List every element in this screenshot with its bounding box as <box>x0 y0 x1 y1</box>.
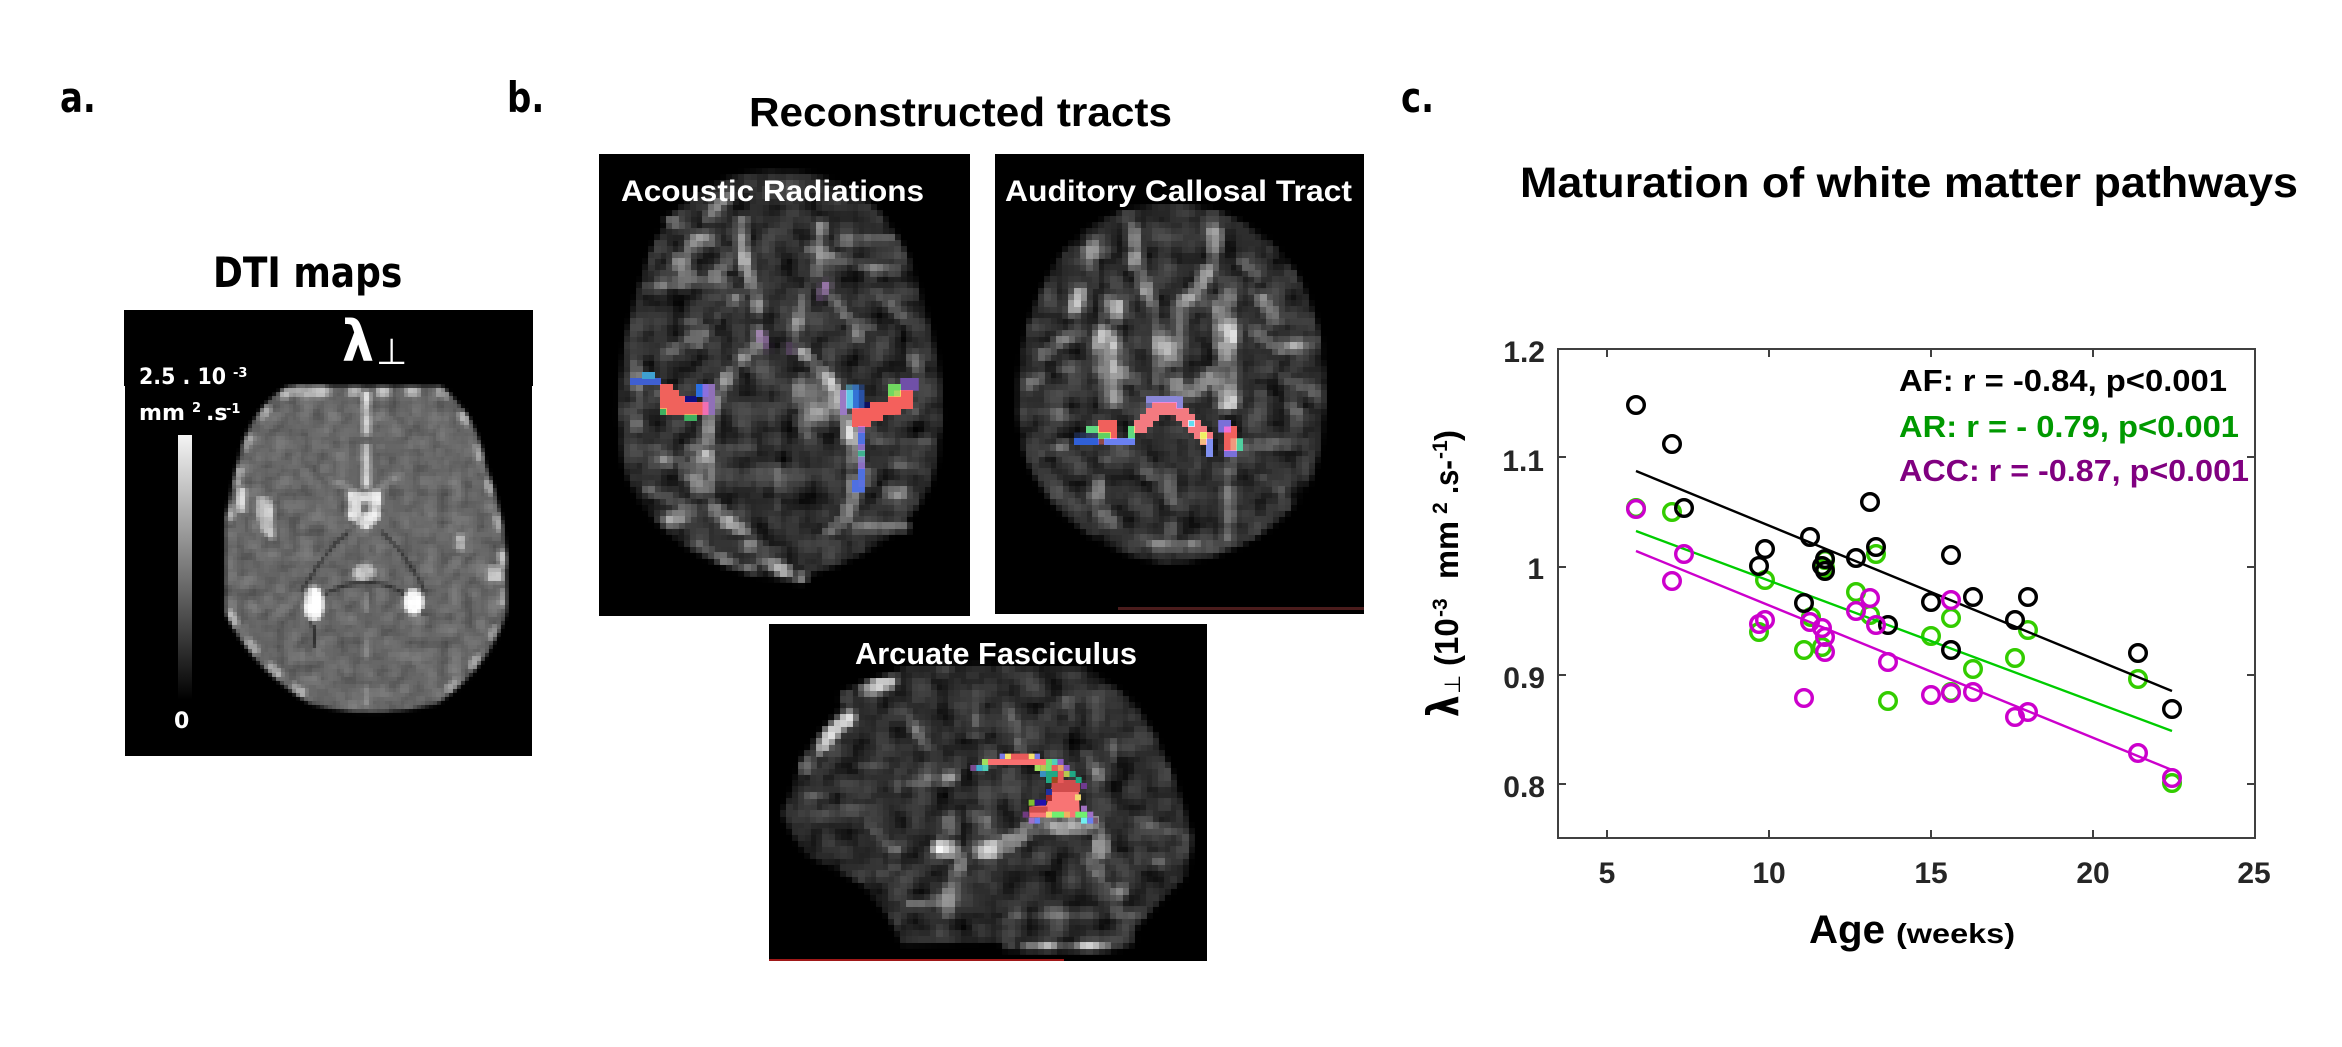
x axis title: (weeks) <box>1896 918 2015 949</box>
symbol: lambda perpendicular: λ <box>342 308 374 375</box>
colour scale maximum label: -3 <box>233 366 247 381</box>
y axis tick labels <box>1502 336 1545 804</box>
panel label: c: c. <box>1401 74 1434 122</box>
panel: Auditory Callosal Tract <box>995 154 1364 614</box>
x axis tick labels: 10 <box>1752 857 1786 890</box>
y axis title: ⊥ <box>1441 675 1466 694</box>
colour scale maximum label: mm <box>139 401 185 426</box>
y axis title: mm <box>1428 521 1465 579</box>
y axis title: 2 <box>1429 502 1452 514</box>
y axis tick labels: 0.9 <box>1503 662 1545 695</box>
label: Auditory Callosal Tract: Auditory Callosal Tract <box>1005 175 1352 208</box>
colour scale maximum label <box>139 365 247 426</box>
panel background <box>599 154 970 616</box>
panel label: b: b. <box>507 74 544 122</box>
tract overlay: left and right acoustic radiations <box>632 373 916 489</box>
panel background <box>995 154 1364 614</box>
label: Acoustic Radiations: Acoustic Radiations <box>621 175 924 208</box>
series: AR regression line <box>1636 531 2172 731</box>
scatter chart <box>1419 336 2271 952</box>
y axis title: ) <box>1428 430 1465 441</box>
y axis title <box>1419 430 1469 717</box>
y axis tick labels: 1 <box>1527 553 1544 586</box>
heading: Maturation of white matter pathways: Maturation of white matter pathways <box>1520 159 2298 207</box>
series: AR data points <box>1628 500 2180 791</box>
colour scale maximum label: 2.5 . 10 <box>139 365 226 390</box>
brain axial image <box>1018 206 1325 563</box>
tract overlay: callosal arch <box>1074 400 1241 457</box>
x axis title: Age <box>1809 908 1885 952</box>
series: AF data points <box>1628 397 2180 717</box>
legend: correlation statistics: AR: r = - 0.79, p<0.001 <box>1899 409 2239 444</box>
symbol: lambda perpendicular: ⊥ <box>376 332 407 373</box>
heading: Reconstructed tracts: Reconstructed tracts <box>749 89 1172 135</box>
x axis tick labels: 25 <box>2237 857 2271 890</box>
colour bar <box>178 435 192 700</box>
x axis tick labels: 5 <box>1599 857 1615 890</box>
series: ACC data points <box>1628 501 2180 786</box>
legend: correlation statistics: AF: r = -0.84, p<0.001 <box>1899 363 2227 398</box>
colour scale maximum label: .s <box>206 401 227 426</box>
panel label: a: a. <box>60 74 96 122</box>
symbol: lambda perpendicular <box>342 308 407 375</box>
panel: DTI map <box>124 308 533 756</box>
panel background <box>769 624 1207 961</box>
x axis tick labels: 15 <box>1914 857 1948 890</box>
axes box and ticks <box>1558 349 2255 838</box>
legend: correlation statistics <box>1899 363 2249 488</box>
y axis title: .s- <box>1428 460 1465 494</box>
heading: DTI maps: DTI maps <box>213 249 402 298</box>
panel: Acoustic Radiations <box>599 154 970 616</box>
panel: Arcuate Fasciculus <box>769 624 1207 961</box>
y axis tick labels: 1.2 <box>1503 336 1545 369</box>
scan artefact line <box>769 959 1064 961</box>
y axis title: (10 <box>1428 618 1465 666</box>
y axis title: λ <box>1419 695 1469 717</box>
colour scale minimum label: 0 <box>174 709 189 734</box>
y axis tick labels: 0.8 <box>1503 771 1545 804</box>
series: AF regression line <box>1636 471 2172 691</box>
panel background <box>124 310 533 756</box>
scan artefact line <box>1118 607 1364 610</box>
y axis title: -3 <box>1429 598 1452 617</box>
brain axial DTI image <box>226 387 506 711</box>
x axis tick labels: 20 <box>2076 857 2110 890</box>
colour scale maximum label: -1 <box>226 402 240 417</box>
x axis title <box>1809 908 2015 952</box>
y axis title: -1 <box>1429 440 1452 459</box>
series: ACC regression line <box>1636 551 2172 770</box>
y axis tick labels: 1.1 <box>1502 445 1544 478</box>
tract overlay: arcuate fasciculus <box>970 754 1098 824</box>
label: Arcuate Fasciculus: Arcuate Fasciculus <box>855 636 1137 671</box>
x axis tick labels <box>1599 857 2271 890</box>
legend: correlation statistics: ACC: r = -0.87, p<0.001 <box>1899 453 2249 488</box>
colour scale maximum label: 2 <box>192 401 201 416</box>
brain axial image <box>620 172 941 579</box>
brain sagittal image <box>783 665 1192 950</box>
